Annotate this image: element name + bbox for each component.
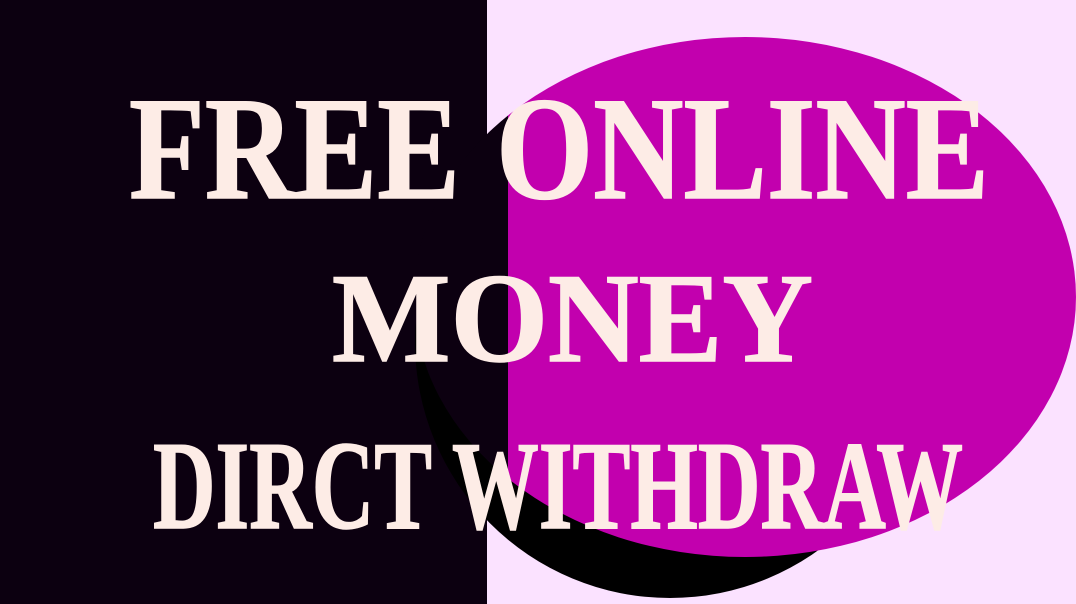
- title line 1: [129, 67, 989, 230]
- title line 2: MONEY: [332, 249, 813, 389]
- title text: [129, 67, 989, 556]
- large ellipse: magenta part: [508, 37, 1076, 557]
- title line 1: ONLINE: [496, 67, 989, 230]
- title line 3: DIRCT: [153, 417, 432, 556]
- large ellipse: dark part: [424, 116, 508, 468]
- panel: dark left half: [0, 0, 487, 604]
- title line 3: [153, 417, 963, 556]
- title line 1: FREE: [129, 67, 460, 230]
- black circle crescent: [415, 86, 925, 598]
